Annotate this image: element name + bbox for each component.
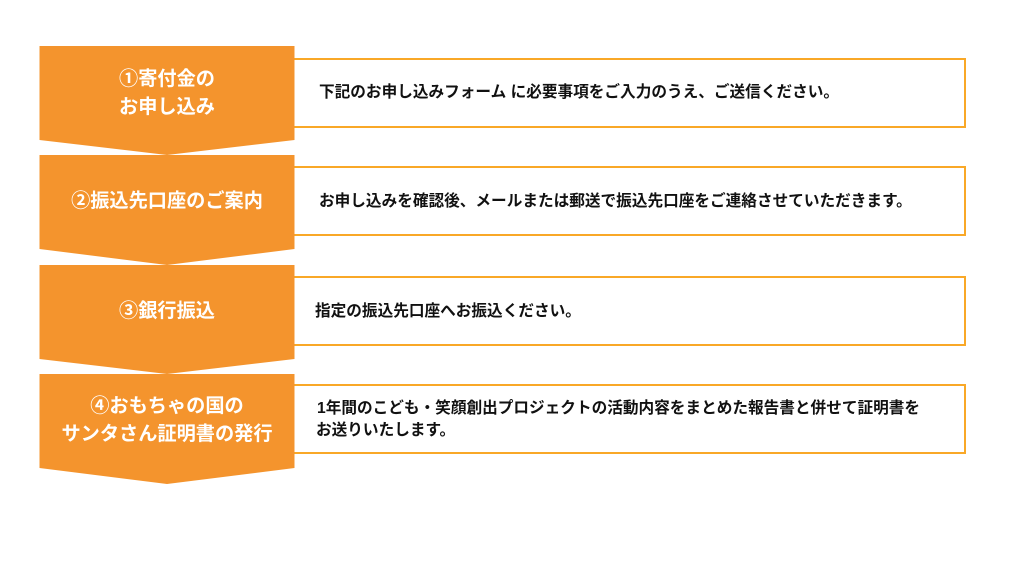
arrow 2 [40, 155, 294, 265]
step 1 [40, 46, 966, 155]
heading 4: サンタさん証明書の発行 [61, 424, 273, 445]
heading 2: ②振込先口座のご案内 [71, 191, 263, 212]
heading 3: ③銀行振込 [119, 301, 215, 322]
description 4: 1年間のこども・笑顔創出プロジェクトの活動内容をまとめた報告書と併せて証明書を [317, 400, 920, 417]
description 2: お申し込みを確認後、メールまたは郵送で振込先口座をご連絡させていただきます。 [319, 193, 912, 210]
text panel 4 [293, 384, 966, 454]
description 1: 下記のお申し込みフォーム に必要事項をご入力のうえ、ご送信ください。 [319, 84, 839, 101]
heading 1: ①寄付金の [119, 69, 215, 90]
description 4: お送りいたします。 [316, 422, 455, 439]
arrow 3 [40, 265, 294, 374]
text panel 2 [293, 166, 966, 236]
heading 1 [119, 68, 215, 118]
heading 1: お申し込み [119, 97, 215, 118]
text panel 1 [293, 58, 966, 128]
step 3 [40, 265, 966, 374]
arrow 1 [40, 46, 294, 155]
text panel 3 [293, 276, 966, 346]
step 4 [40, 374, 966, 484]
heading 4 [61, 395, 273, 445]
description 3: 指定の振込先口座へお振込ください。 [315, 303, 581, 320]
heading 4: ④おもちゃの国の [90, 396, 244, 417]
description 4 [316, 399, 920, 439]
arrow 4 [40, 374, 294, 484]
step 2 [40, 155, 966, 265]
